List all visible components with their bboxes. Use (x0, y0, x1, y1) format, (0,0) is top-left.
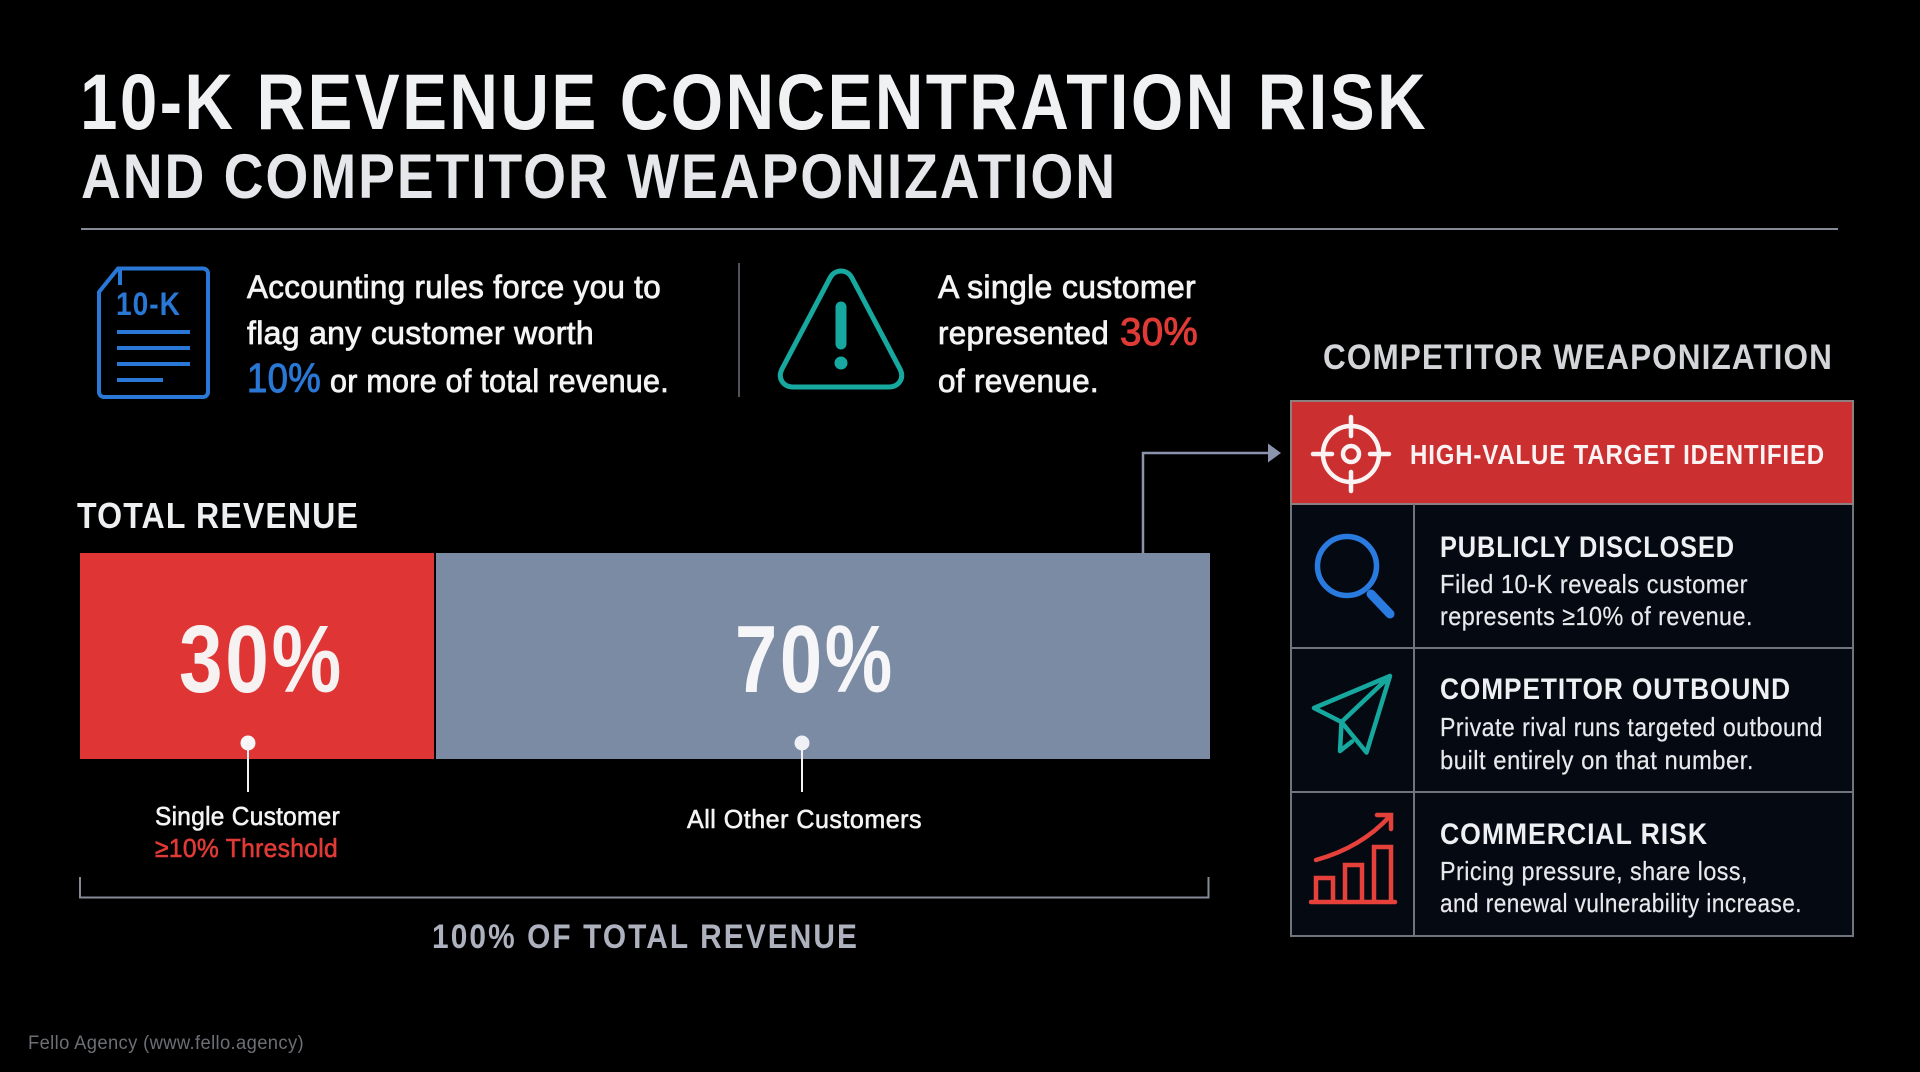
row: publicly disclosed: Filed 10-K reveals customer (1440, 569, 1748, 599)
row: publicly disclosed: represents ≥10% of revenue. (1440, 601, 1753, 631)
footer credit: Fello Agency (www.fello.agency) (28, 1033, 304, 1054)
row: commercial risk (1311, 815, 1802, 918)
title: 10-K REVENUE CONCENTRATION RISK (80, 57, 1428, 146)
heading: total revenue: TOTAL REVENUE (77, 495, 359, 536)
bar chart: total revenue (80, 553, 1210, 792)
text block: single customer: represented (938, 315, 1109, 351)
text block: single customer: A single customer (938, 269, 1196, 305)
row: competitor outbound (1314, 673, 1823, 775)
panel header: high-value target: HIGH-VALUE TARGET IDENTIFIED (1410, 439, 1825, 470)
row: commercial risk: Pricing pressure, share loss, (1440, 856, 1748, 886)
row: competitor outbound: COMPETITOR OUTBOUND (1440, 673, 1791, 706)
row: publicly disclosed (1318, 531, 1753, 631)
text block: single customer (938, 269, 1198, 399)
bracket: 100 percent (80, 877, 1208, 898)
row: publicly disclosed: PUBLICLY DISCLOSED (1440, 531, 1735, 564)
row: competitor outbound: built entirely on that number. (1440, 745, 1754, 775)
label: single customer: Single Customer (155, 801, 340, 831)
icon: paper plane (1314, 676, 1390, 752)
icon: target (1313, 417, 1389, 491)
text block: single customer: 30% (1120, 311, 1198, 354)
bar segment: 70 percent: 70% (735, 606, 895, 713)
row: competitor outbound: Private rival runs targeted outbound (1440, 712, 1823, 742)
bar segment: 30 percent (80, 553, 434, 792)
panel: competitor weaponization (1291, 401, 1853, 936)
icon: 10-K document: 10-K (116, 286, 181, 322)
row: commercial risk: and renewal vulnerability increase. (1440, 888, 1802, 918)
bar segment: 70 percent (436, 553, 1210, 792)
panel header: high-value target (1291, 401, 1853, 504)
label: single customer: ≥10% Threshold (155, 833, 338, 863)
text block: accounting rules: flag any customer worth (247, 315, 594, 351)
label: single customer (155, 801, 340, 863)
title: AND COMPETITOR WEAPONIZATION (81, 142, 1117, 212)
text block: accounting rules: or more of total revenue. (330, 363, 669, 399)
text block: single customer: of revenue. (938, 363, 1099, 399)
arrow: to competitor panel (1143, 444, 1281, 553)
bar segment: 30 percent: 30% (179, 606, 344, 713)
icon: rising bar chart (1311, 815, 1395, 902)
text block: accounting rules (247, 269, 669, 401)
row: commercial risk: COMMERCIAL RISK (1440, 818, 1708, 851)
text block: accounting rules: 10% (247, 355, 321, 401)
icon: warning triangle (780, 271, 902, 387)
text block: accounting rules: Accounting rules force you to (247, 269, 661, 305)
title (80, 57, 1428, 212)
heading: competitor weaponization: COMPETITOR WEAPONIZATION (1323, 338, 1833, 377)
icon: magnifier (1318, 536, 1390, 614)
icon: 10-K document (99, 268, 208, 397)
label: all other customers: All Other Customers (687, 804, 922, 834)
label: 100 percent of total revenue: 100% OF TOTAL REVENUE (432, 918, 859, 956)
